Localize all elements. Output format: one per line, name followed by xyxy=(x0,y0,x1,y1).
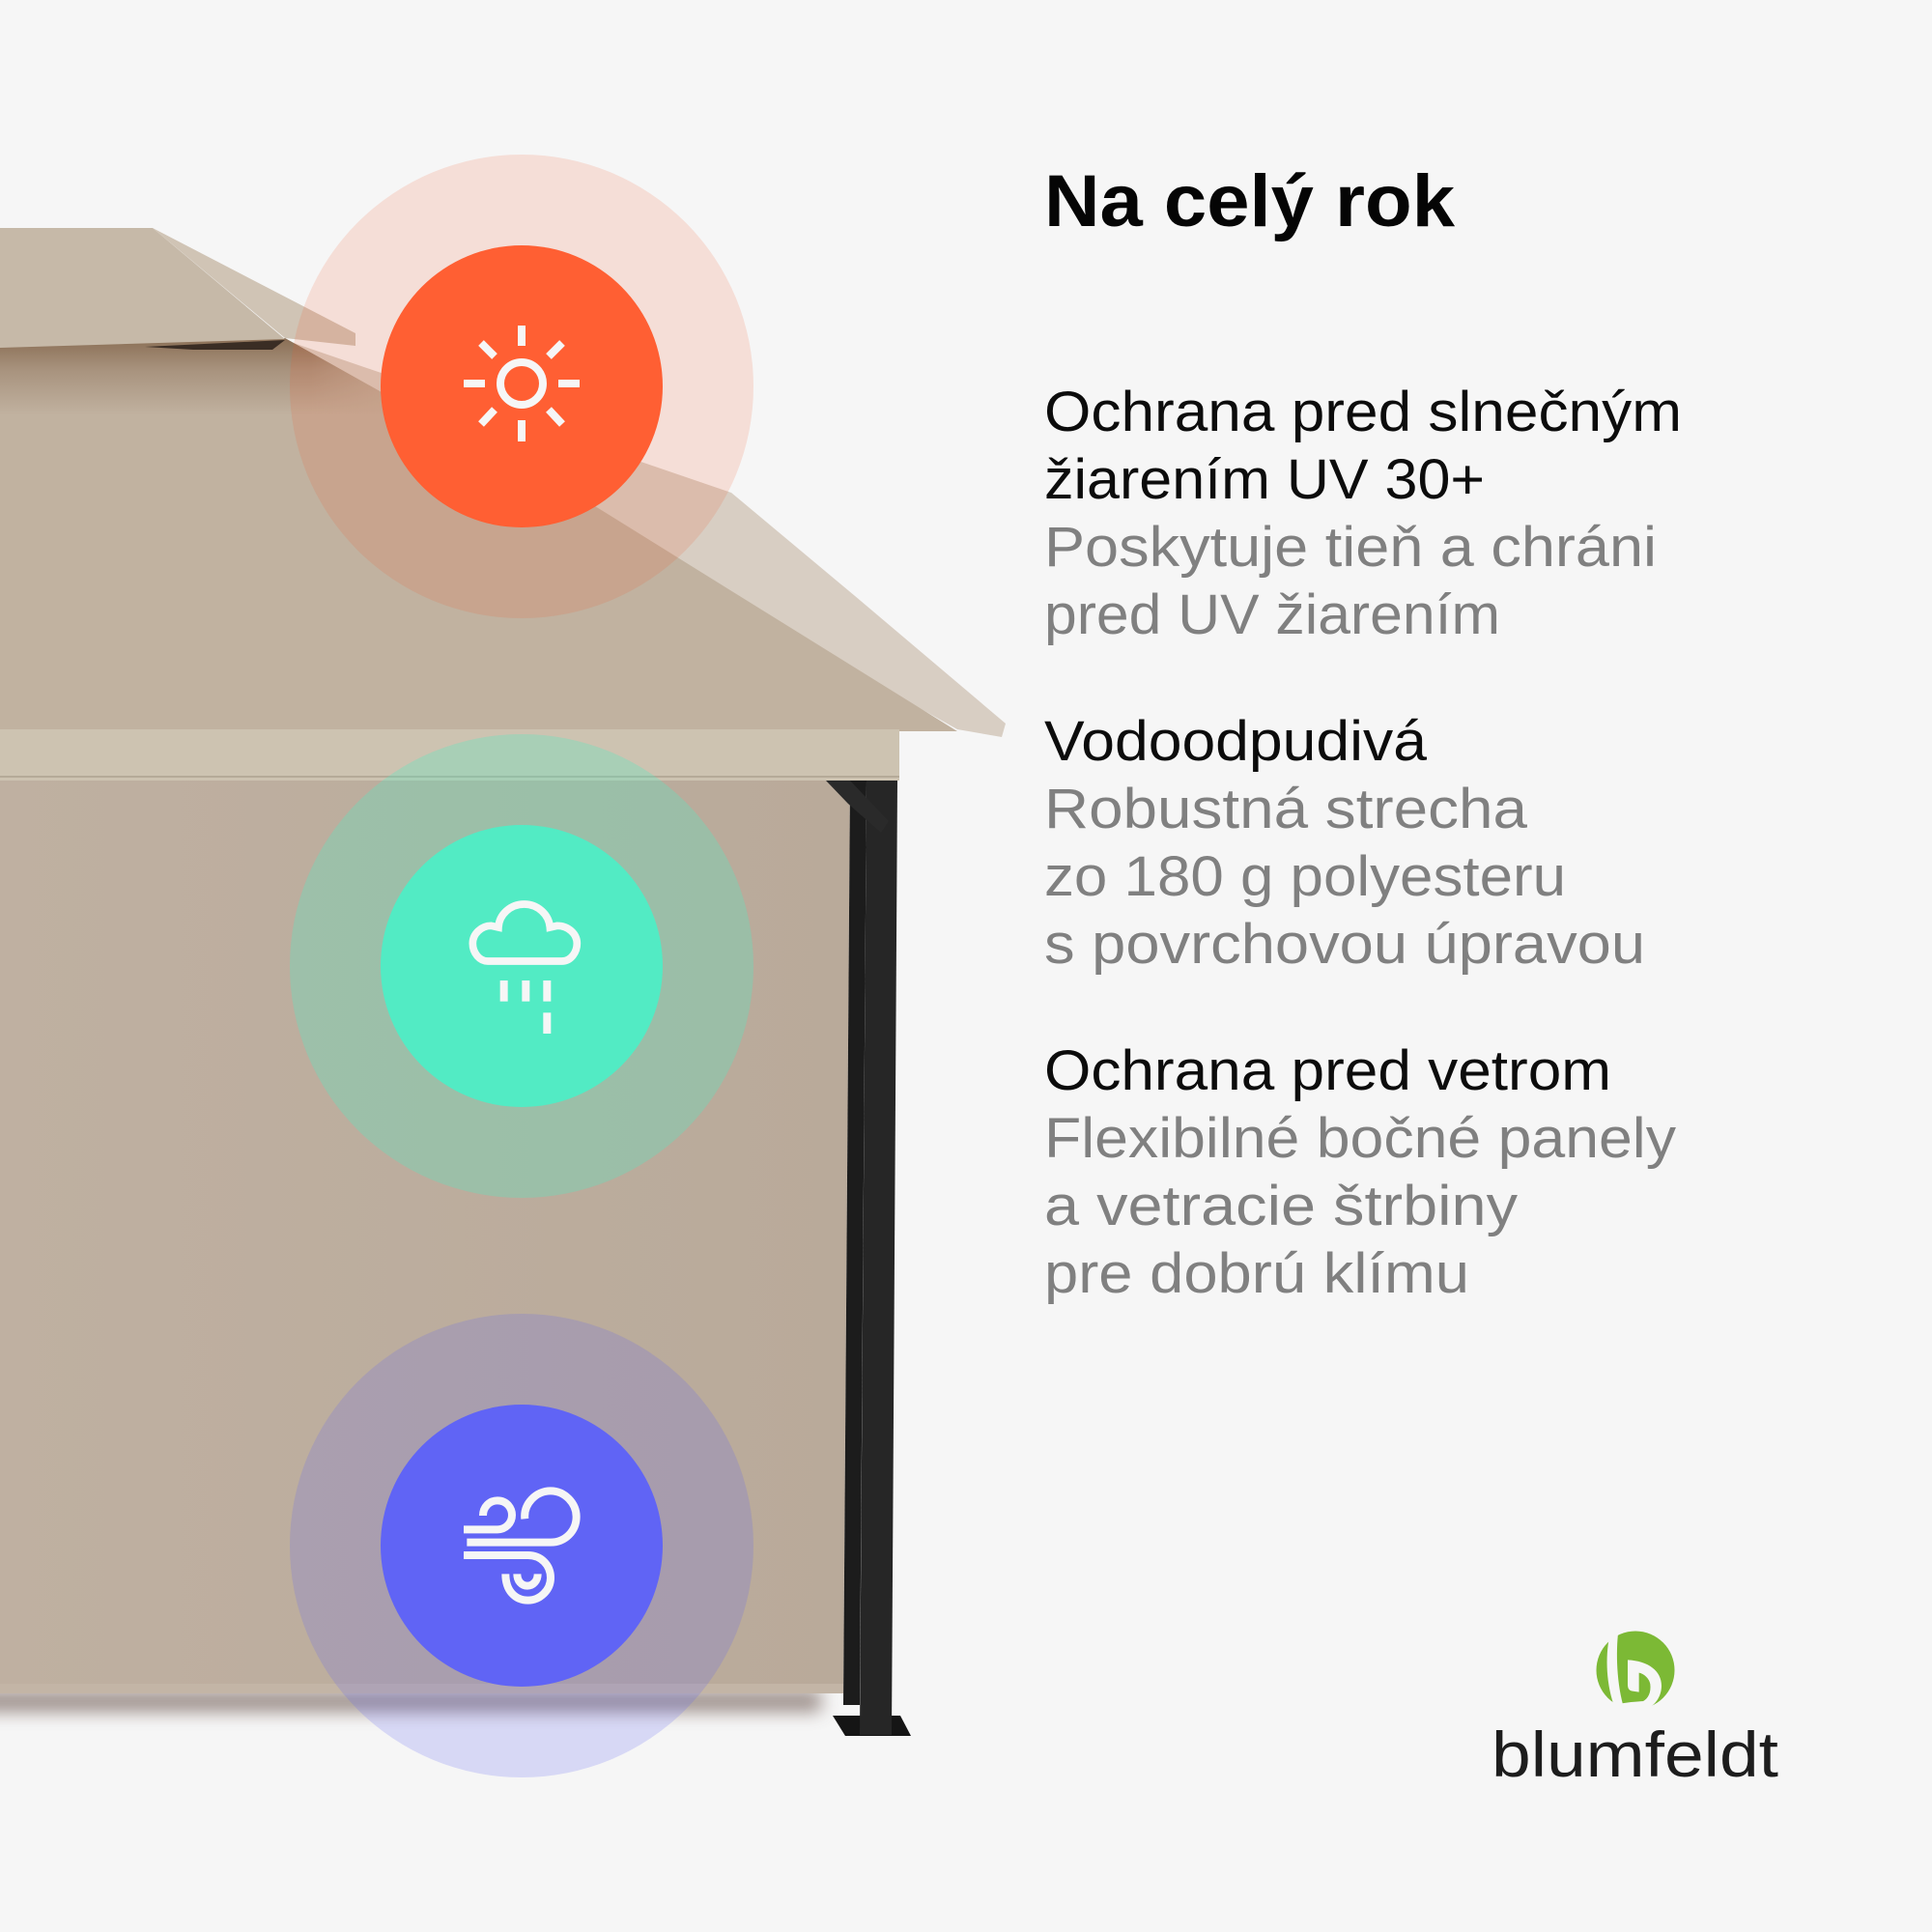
upper roof slope facet xyxy=(153,228,355,346)
icon: rain cloud xyxy=(472,904,577,1034)
valance hem xyxy=(0,776,899,778)
text block: UV protection: Poskytuje tieň a chráni xyxy=(1044,516,1657,579)
upper roof tier xyxy=(0,228,285,348)
icon: wind xyxy=(464,1491,577,1601)
inner post xyxy=(843,781,867,1705)
corner bracket xyxy=(826,781,889,833)
text block: wind protection: Ochrana pred vetrom xyxy=(1044,1039,1611,1102)
text block: water repellent xyxy=(1044,710,1645,976)
main roof front facet xyxy=(0,338,957,731)
side panel xyxy=(0,778,850,1693)
circle: wind xyxy=(290,1314,753,1777)
circle: sun xyxy=(290,155,753,618)
gazebo photo xyxy=(0,228,1006,1736)
text block: UV protection: Ochrana pred slnečným xyxy=(1044,381,1682,443)
text block: wind protection: Flexibilné bočné panely xyxy=(1044,1107,1676,1170)
text block: wind protection xyxy=(1044,1039,1676,1305)
text block: wind protection: pre dobrú klímu xyxy=(1044,1242,1469,1305)
text block: UV protection: pred UV žiarením xyxy=(1044,583,1500,646)
wordmark: blumfeldt xyxy=(1492,1719,1778,1790)
text block: water repellent: Robustná strecha xyxy=(1044,778,1528,840)
main roof side facet xyxy=(285,340,1006,737)
text block: water repellent: zo 180 g polyesteru xyxy=(1044,845,1566,908)
text block: UV protection xyxy=(1044,381,1682,646)
ground shadow xyxy=(0,1690,821,1712)
base plate xyxy=(833,1716,911,1736)
panel hem xyxy=(0,1684,843,1693)
text block: water repellent: Vodoodpudivá xyxy=(1044,710,1428,773)
valance xyxy=(0,729,899,781)
circle: rain xyxy=(290,734,753,1198)
text block: water repellent: s povrchovou úpravou xyxy=(1044,913,1645,976)
main post xyxy=(860,781,897,1735)
roof gap xyxy=(145,340,285,350)
title: Na celý rok xyxy=(1044,160,1456,242)
logo mark xyxy=(1596,1631,1675,1715)
text block: wind protection: a vetracie štrbiny xyxy=(1044,1175,1518,1237)
text block: UV protection: žiarením UV 30+ xyxy=(1044,448,1485,511)
icon: sun xyxy=(464,326,580,441)
shadow under upper roof xyxy=(0,338,373,404)
logo: blumfeldt xyxy=(1492,1631,1778,1790)
